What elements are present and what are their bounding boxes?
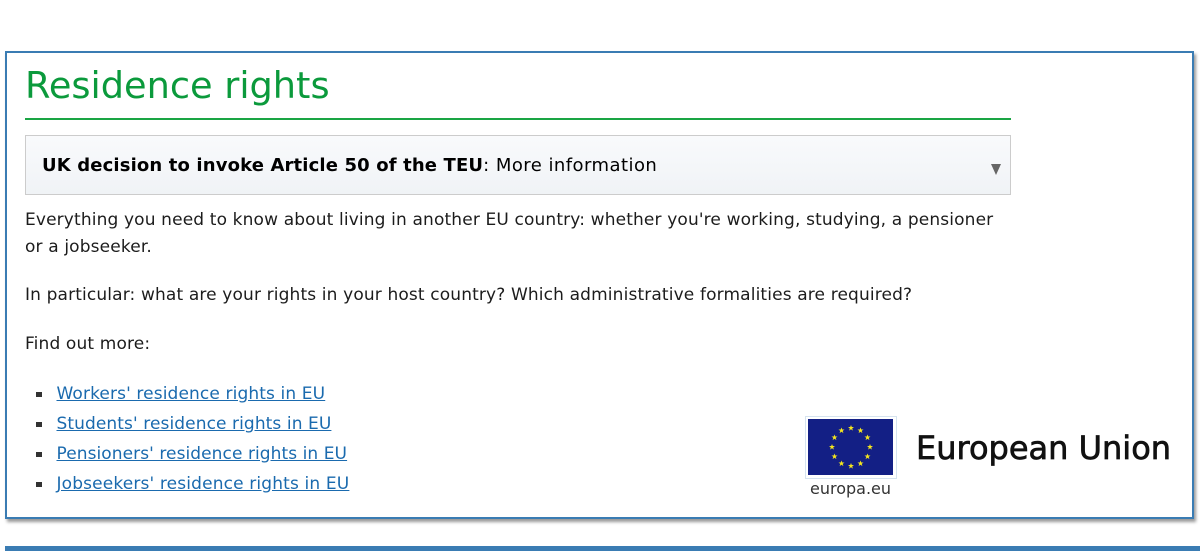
icon: dropdown arrow: [991, 164, 1001, 175]
link: jobseekers: Jobseekers' residence rights in EU: [56, 474, 349, 494]
bottom bar: [5, 546, 1200, 551]
intro text: [25, 210, 994, 257]
notice text: UK decision to invoke Article 50 of the TEU: More information: [42, 155, 657, 176]
title rule: [25, 118, 1011, 120]
link list: [56, 384, 350, 494]
icon: EU flag: [805, 416, 897, 479]
europa.eu label: europa.eu: [810, 479, 891, 498]
link: workers: Workers' residence rights in EU: [56, 384, 325, 404]
find out more: Find out more:: [25, 334, 150, 354]
title: Residence rights: [25, 64, 330, 107]
link: students: Students' residence rights in EU: [56, 414, 331, 434]
link: pensioners: Pensioners' residence rights in EU: [56, 444, 347, 464]
notice bar: [25, 135, 1011, 195]
European Union label: European Union: [916, 429, 1171, 467]
question text: In particular: what are your rights in your host country? Which administrative formalities are required?: [25, 285, 912, 305]
intro text: or a jobseeker.: [25, 237, 152, 257]
intro text: Everything you need to know about living in another EU country: whether you're working, studying, a pensioner: [25, 210, 993, 230]
